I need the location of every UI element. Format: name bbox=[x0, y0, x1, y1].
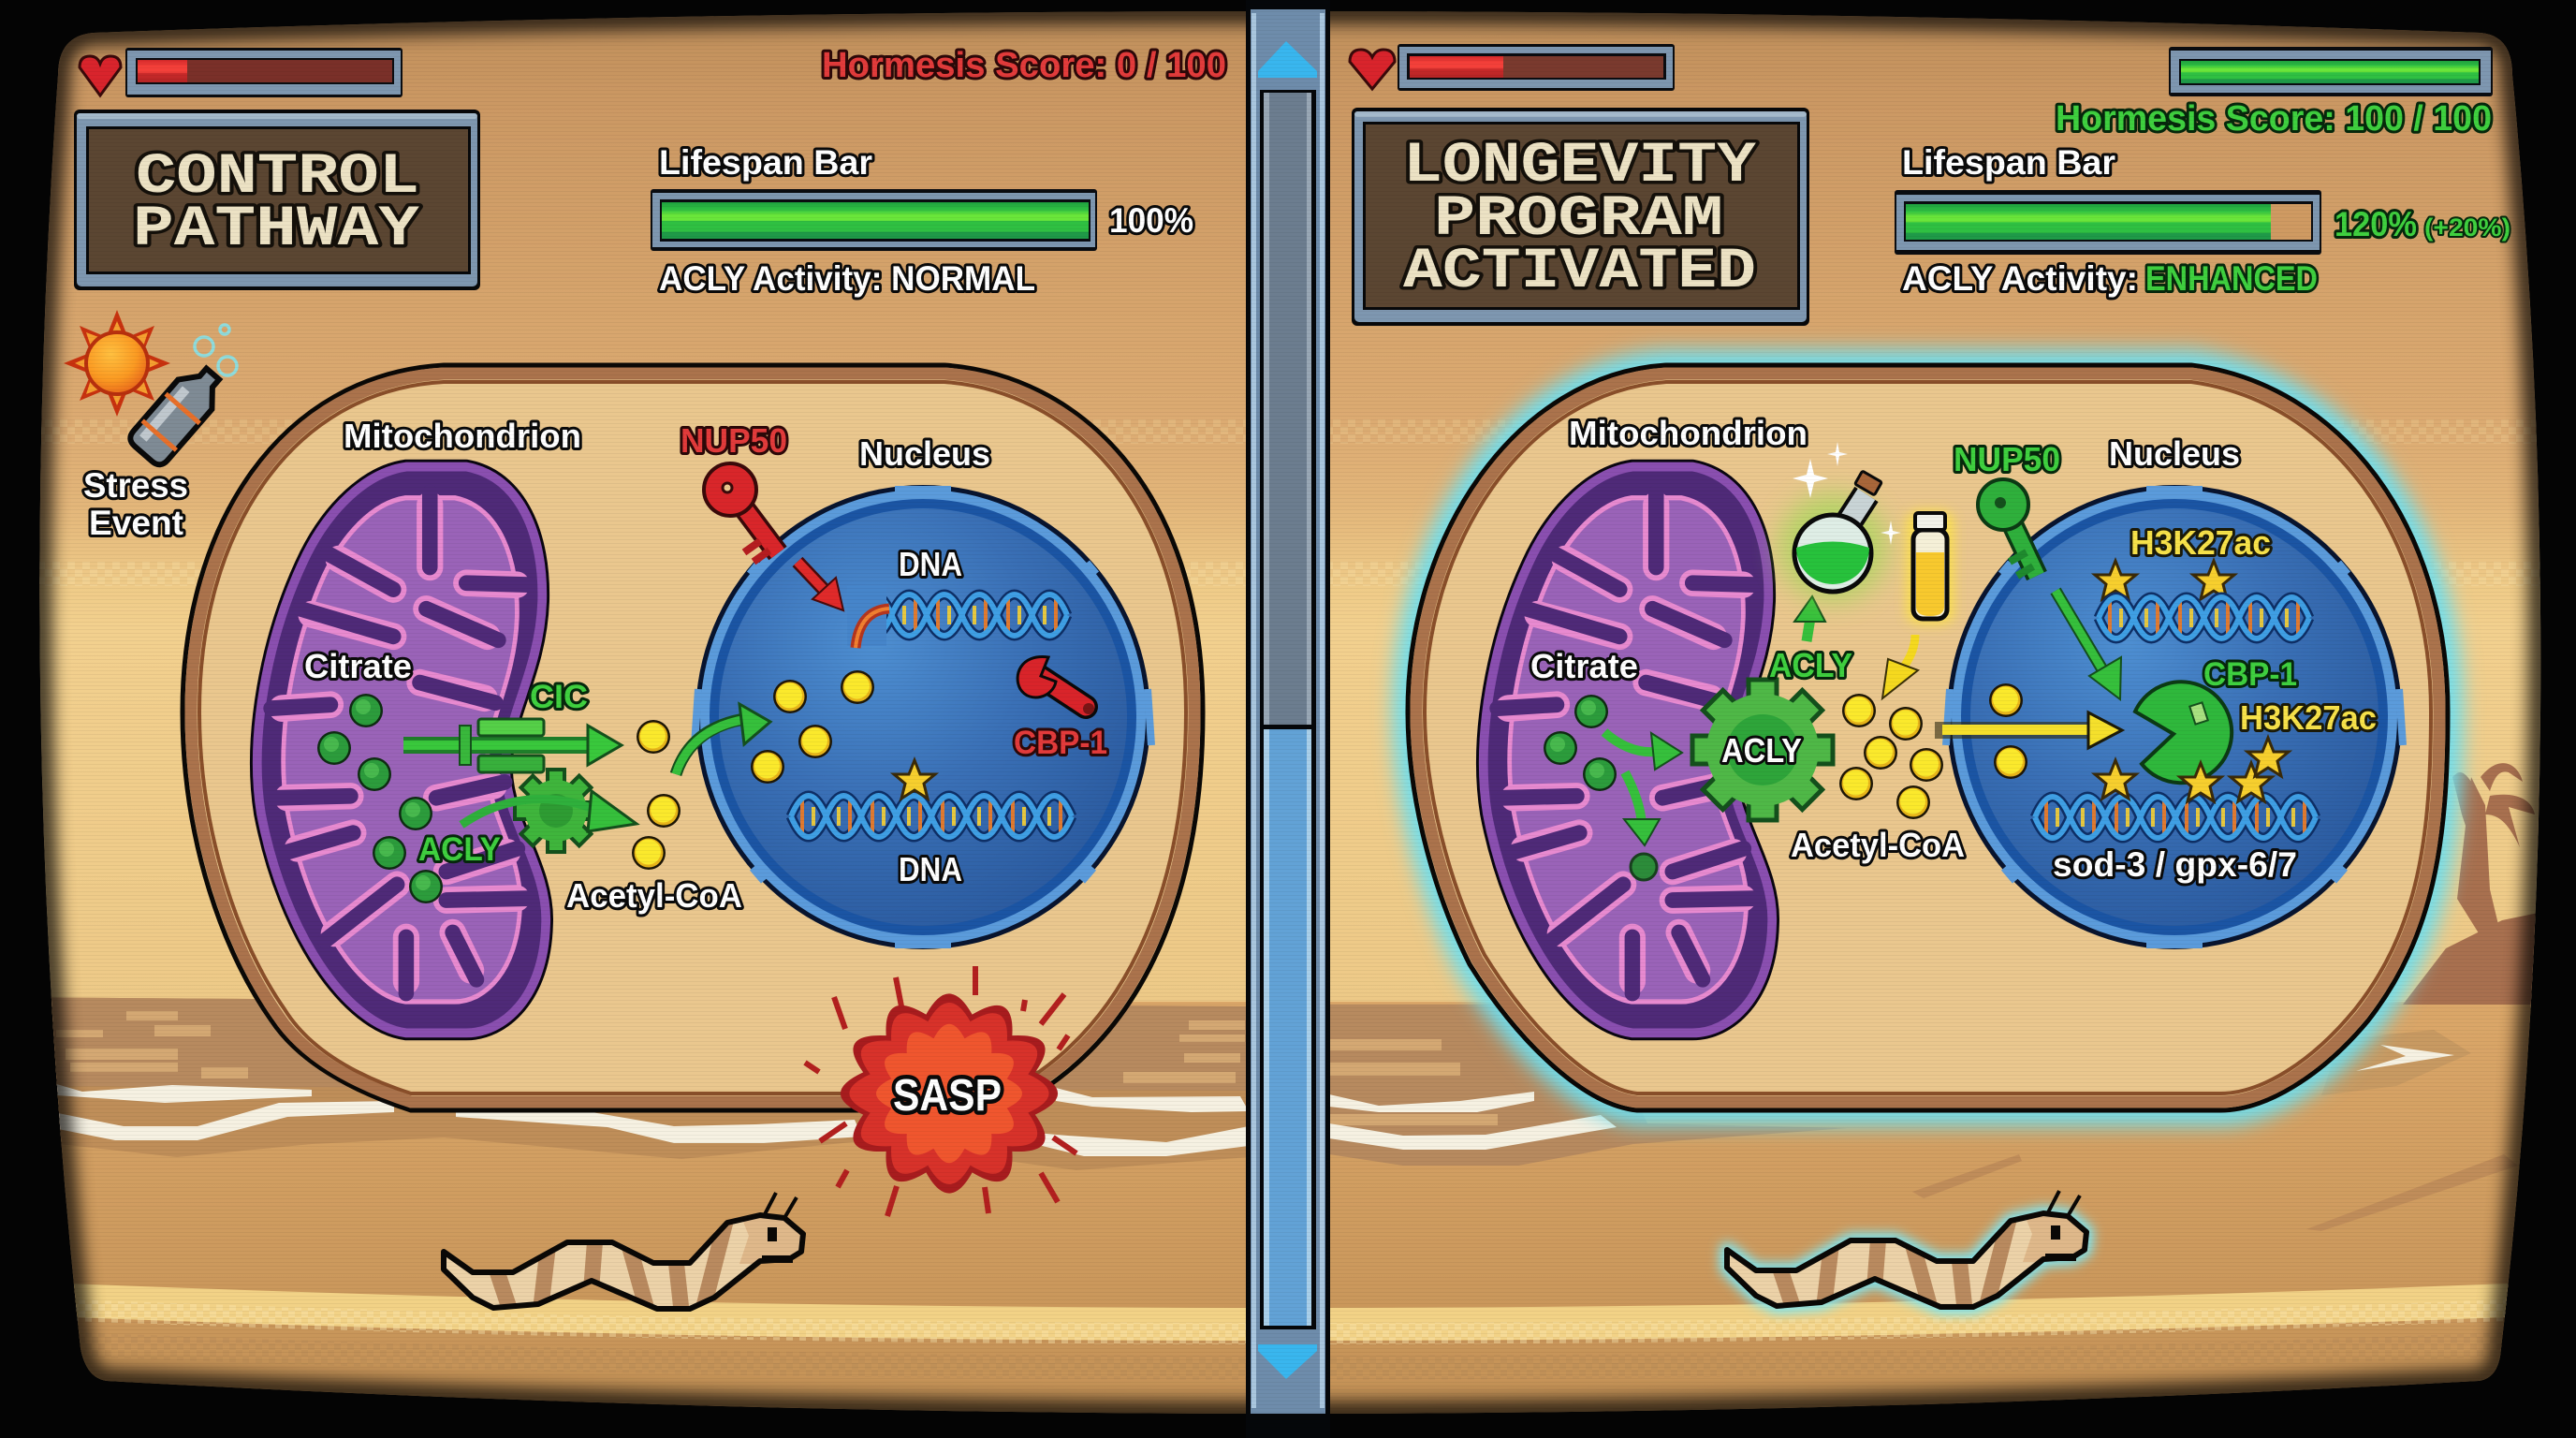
CIC transporter and arrow bbox=[403, 719, 622, 772]
left hormesis score: Hormesis Score: 0 / 100 bbox=[822, 46, 1226, 85]
label: ACLY in gear: ACLY bbox=[1721, 731, 1802, 770]
label: DNA upper: DNA bbox=[899, 545, 962, 583]
title panel: longevity program activated bbox=[1352, 108, 1809, 326]
label: acetyl-CoA: Acetyl-CoA bbox=[566, 876, 742, 915]
ACLY gear left bbox=[461, 770, 637, 852]
left lifespan bar bbox=[651, 189, 1097, 251]
label: stress event bbox=[83, 466, 188, 542]
icon: star bbox=[894, 760, 935, 799]
right ACLY activity: ENHANCED bbox=[2145, 259, 2318, 298]
right lifespan percent bbox=[2334, 205, 2510, 243]
left lifespan percent: 100% bbox=[1109, 201, 1193, 240]
right mitochondrion bbox=[1484, 467, 1772, 1033]
icon: down arrow bbox=[1258, 1344, 1317, 1379]
scrollbar thumb: empty part bbox=[1264, 93, 1311, 725]
hormesis score bar bbox=[2169, 47, 2493, 96]
ACLY gear right bbox=[1692, 680, 1833, 820]
lower DNA right bbox=[2035, 797, 2316, 838]
lower sand ground bbox=[0, 1002, 2576, 1438]
label: mitochondrion right: Mitochondrion bbox=[1569, 414, 1808, 452]
label: stress event: Stress bbox=[83, 466, 188, 505]
label: SASP: SASP bbox=[893, 1071, 1002, 1121]
right hormesis score: Hormesis Score: 100 / 100 bbox=[2056, 99, 2492, 139]
left worm bbox=[444, 1193, 814, 1311]
citrate molecules right bbox=[1544, 695, 1657, 880]
health bar bbox=[125, 48, 402, 97]
label: H3K27ac top: H3K27ac bbox=[2130, 523, 2271, 562]
SASP burst bbox=[805, 966, 1076, 1216]
left mitochondrion bbox=[257, 467, 546, 1033]
right lifespan percent: (+20%) bbox=[2424, 213, 2510, 242]
title panel: control pathway: CONTROL bbox=[136, 145, 419, 210]
title panel: control pathway: PATHWAY bbox=[133, 198, 419, 262]
icon: green flask bbox=[1778, 471, 1887, 602]
bottom sand bands bbox=[73, 1284, 2509, 1356]
right cell with glow bbox=[1408, 365, 2448, 1110]
title panel: longevity program activated: ACTIVATED bbox=[1403, 240, 1756, 304]
title panel: longevity program activated: LONGEVITY bbox=[1403, 134, 1756, 198]
acetyl-CoA molecules right bbox=[1839, 694, 1943, 819]
health bar right bbox=[1398, 44, 1675, 91]
acetyl-CoA molecules bbox=[632, 720, 681, 870]
right nucleus bbox=[1946, 485, 2403, 949]
label: H3K27ac right: H3K27ac bbox=[2240, 698, 2377, 737]
icon: red wrench bbox=[1017, 657, 1094, 714]
upper DNA right bbox=[2099, 597, 2309, 638]
curved arrow into nucleus bbox=[676, 704, 770, 774]
arrow up to flask bbox=[1794, 596, 1825, 641]
right lifespan bar bbox=[1895, 190, 2321, 255]
label: NUP50 left: NUP50 bbox=[681, 421, 787, 460]
right HUD: health bbox=[1350, 44, 1675, 91]
scrollbar divider bbox=[1246, 0, 1330, 1438]
label: citrate right: Citrate bbox=[1530, 647, 1638, 685]
citrate molecules bbox=[317, 694, 443, 903]
upper DNA strand, broken bbox=[847, 586, 1067, 648]
label: mitochondrion: Mitochondrion bbox=[344, 417, 581, 455]
right shoreline waves bbox=[1329, 1005, 2518, 1231]
citrate arrows bbox=[1604, 732, 1682, 845]
icon: heart right bbox=[1350, 50, 1395, 89]
yellow arrow from vial bbox=[1882, 635, 1918, 698]
scrollbar thumb: filled part bbox=[1264, 729, 1311, 1326]
stress event bbox=[64, 310, 237, 542]
icon: green key bbox=[1978, 479, 2037, 576]
icon: up arrow bbox=[1258, 41, 1317, 78]
acetyl-CoA in nucleus right bbox=[1989, 683, 2027, 779]
icon: sun bbox=[64, 310, 170, 417]
shrapnel bbox=[805, 966, 1076, 1216]
palm tree silhouette on hill bbox=[2403, 763, 2539, 1005]
label: nucleus: Nucleus bbox=[859, 434, 990, 473]
title panel: control pathway bbox=[74, 110, 480, 290]
yellow long arrow bbox=[1935, 712, 2122, 748]
icon: green CBP-1 pacman bbox=[2135, 682, 2232, 783]
icon: yellow vial bbox=[1906, 510, 1954, 624]
red arrow to DNA bbox=[798, 562, 843, 610]
green arrow to CBP-1 bbox=[2056, 591, 2121, 699]
label: sod-3 / gpx-6/7: sod-3 / gpx-6/7 bbox=[2053, 845, 2297, 884]
left shoreline waves bbox=[0, 997, 1249, 1170]
label: CBP-1 right: CBP-1 bbox=[2203, 656, 2297, 693]
left cell bbox=[183, 365, 1203, 1110]
label: CBP-1 left: CBP-1 bbox=[1014, 725, 1107, 761]
left ACLY activity: ACLY Activity: NORMAL bbox=[659, 259, 1035, 298]
right lifespan percent: 120% bbox=[2334, 205, 2417, 243]
left lifespan label: Lifespan Bar bbox=[659, 143, 872, 182]
sparkles bbox=[1793, 442, 1901, 545]
label: stress event: Event bbox=[89, 504, 183, 542]
lower DNA strand bbox=[791, 796, 1072, 837]
label: nucleus right: Nucleus bbox=[2109, 434, 2240, 473]
icon: heart bbox=[80, 56, 121, 95]
icon: bubbles bbox=[195, 325, 237, 375]
left nucleus bbox=[695, 485, 1151, 949]
right ACLY activity: ACLY Activity: bbox=[1902, 259, 2138, 298]
left HUD: health bbox=[80, 48, 402, 97]
title panel: longevity program activated: PROGRAM bbox=[1434, 187, 1723, 252]
label: DNA lower: DNA bbox=[899, 850, 962, 888]
right ACLY activity bbox=[1902, 259, 2318, 298]
right lifespan label: Lifespan Bar bbox=[1902, 143, 2115, 182]
label: CIC: CIC bbox=[530, 679, 588, 715]
icon: red key bbox=[704, 463, 778, 562]
sky and dry sand gradient bbox=[0, 0, 2576, 1011]
label: ACLY left: ACLY bbox=[418, 831, 501, 868]
icon: bottle bbox=[126, 360, 229, 468]
label: citrate: Citrate bbox=[304, 647, 412, 685]
stars on lower DNA bbox=[2095, 738, 2289, 801]
label: acetyl-CoA right: Acetyl-CoA bbox=[1791, 826, 1965, 864]
label: ACLY right: ACLY bbox=[1769, 646, 1852, 684]
stars on upper DNA bbox=[2095, 561, 2234, 599]
acetyl-CoA in nucleus bbox=[751, 670, 874, 784]
label: NUP50 right: NUP50 bbox=[1954, 440, 2060, 478]
right worm with glow bbox=[1727, 1191, 2098, 1309]
